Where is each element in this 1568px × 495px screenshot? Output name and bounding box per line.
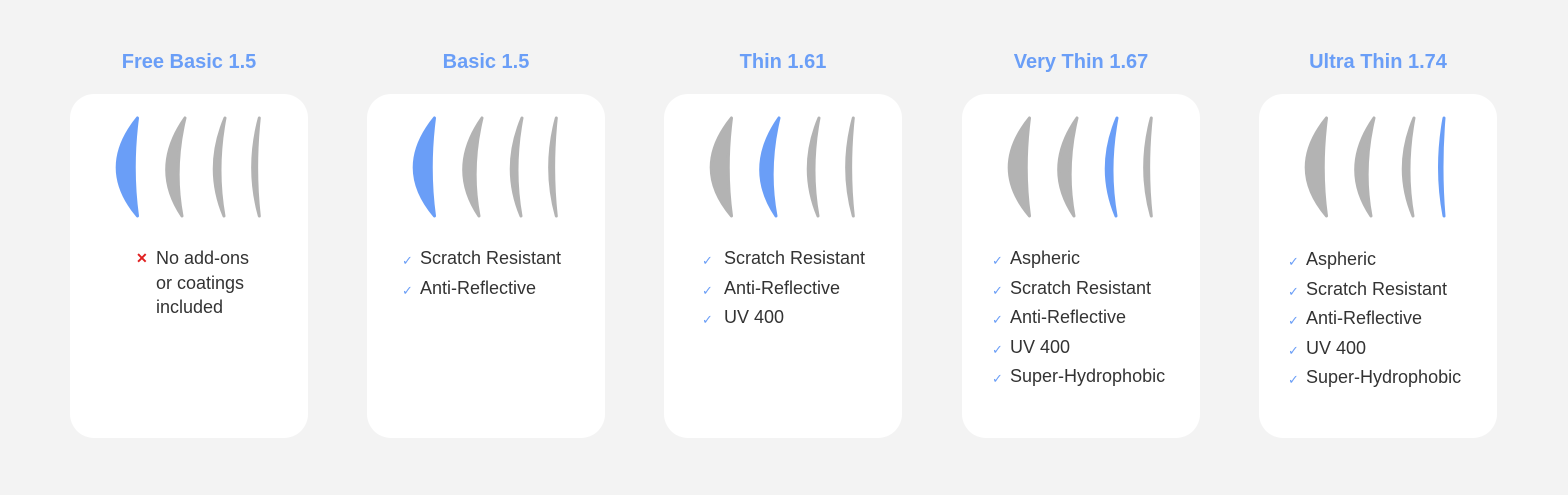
list: features [1288, 249, 1461, 387]
list: features: UV 400 [724, 307, 784, 327]
list: features [992, 248, 1165, 386]
title: Free Basic 1.5: Free Basic 1.5 [122, 51, 256, 73]
title: Very Thin 1.67: Very Thin 1.67 [1014, 51, 1148, 73]
panel: Ultra Thin 1.74: ✓ [1288, 254, 1299, 269]
list: features: Super-Hydrophobic [1306, 367, 1461, 387]
text: no add-ons [136, 248, 249, 317]
text: no add-ons: included [156, 297, 223, 317]
icon: lenses [412, 116, 558, 218]
icon: lenses [710, 116, 855, 218]
list: features: Anti-Reflective [1306, 308, 1422, 328]
panel: Free Basic 1.5 [70, 94, 308, 438]
list: features: Scratch Resistant [420, 248, 561, 268]
panel: Thin 1.61: ✓ [702, 282, 713, 298]
panel: Ultra Thin 1.74 [1259, 94, 1497, 438]
list: features: UV 400 [1306, 338, 1366, 358]
list: features: Aspheric [1010, 248, 1080, 268]
list: features: Super-Hydrophobic [1010, 366, 1165, 386]
panel: Basic 1.5: ✓ [402, 282, 413, 298]
panel: Very Thin 1.67: ✓ [992, 282, 1003, 298]
panel: Ultra Thin 1.74: ✓ [1288, 372, 1299, 387]
list: features [402, 248, 561, 298]
panel: Ultra Thin 1.74: ✓ [1288, 313, 1299, 328]
list: features: Anti-Reflective [724, 278, 840, 298]
text: no add-ons: No add-ons [156, 248, 249, 268]
panel: Thin 1.61: ✓ [702, 312, 713, 327]
panel: Very Thin 1.67: ✓ [992, 312, 1003, 327]
panel: Basic 1.5: ✓ [402, 253, 413, 268]
panel: Thin 1.61: ✓ [702, 253, 713, 268]
panel: Ultra Thin 1.74: ✓ [1288, 284, 1299, 298]
panel: Thin 1.61 [664, 94, 902, 438]
panel: Very Thin 1.67: ✓ [992, 253, 1003, 268]
list: features: UV 400 [1010, 336, 1070, 356]
panel: Ultra Thin 1.74: ✓ [1288, 342, 1299, 358]
icon: lenses [116, 116, 261, 218]
panel: Very Thin 1.67 [962, 94, 1200, 438]
list: features: Aspheric [1306, 249, 1376, 269]
list: features: Scratch Resistant [1010, 278, 1151, 298]
list: features: Anti-Reflective [1010, 307, 1126, 327]
title: Thin 1.61: Thin 1.61 [740, 51, 826, 73]
icon: lenses [1304, 116, 1446, 218]
list: features: Scratch Resistant [1306, 278, 1447, 298]
list: features: Anti-Reflective [420, 278, 536, 298]
icon: lenses [1008, 116, 1153, 218]
title: Ultra Thin 1.74: Ultra Thin 1.74 [1309, 51, 1447, 73]
panel: Free Basic 1.5: ✕ [136, 250, 148, 266]
panel: Very Thin 1.67: ✓ [992, 371, 1003, 386]
title: Basic 1.5: Basic 1.5 [443, 51, 529, 73]
panel: Basic 1.5 [367, 94, 605, 438]
list: features [702, 248, 865, 327]
panel: Very Thin 1.67: ✓ [992, 342, 1003, 356]
list: features: Scratch Resistant [724, 248, 865, 268]
text: no add-ons: or coatings [156, 272, 244, 292]
